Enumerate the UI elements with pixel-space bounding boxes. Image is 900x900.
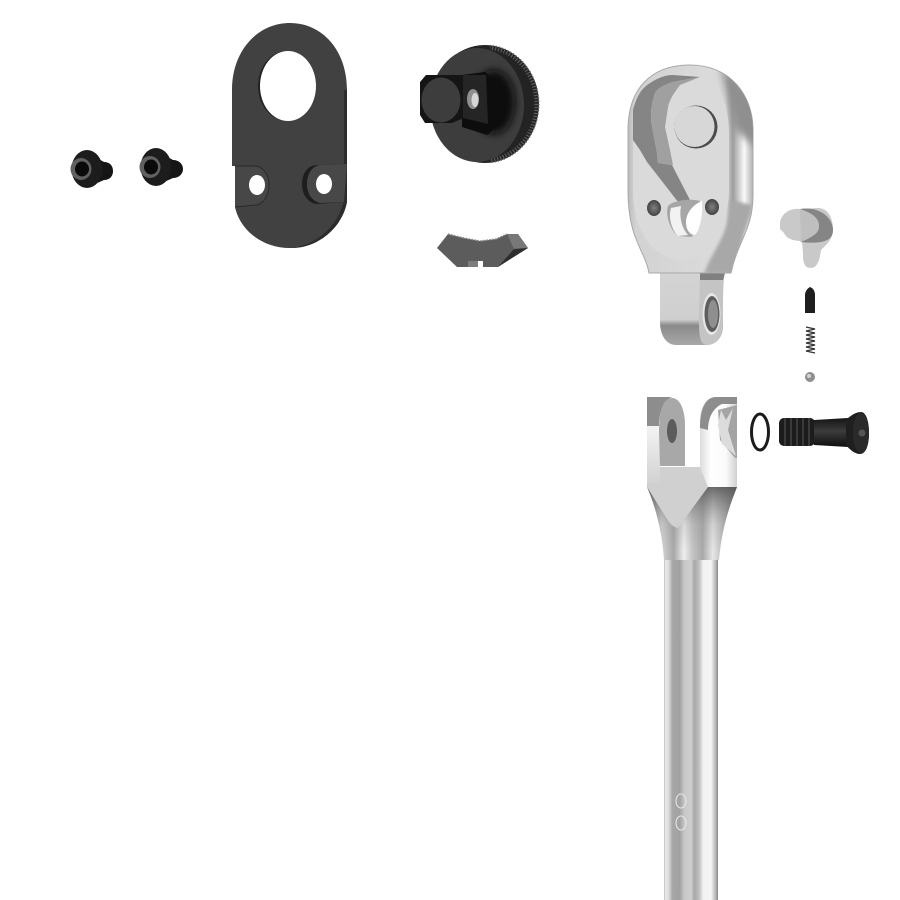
fork right block — [700, 397, 737, 487]
screw: small right — [140, 148, 183, 186]
plate holes — [249, 51, 332, 195]
recess channel outer — [633, 75, 700, 207]
cover plate — [232, 23, 347, 248]
handle with fork — [647, 397, 737, 900]
ratchet gear with square drive — [420, 45, 539, 163]
head circle recess — [674, 106, 718, 148]
fork left top — [647, 397, 672, 426]
recess channel inner — [651, 77, 700, 165]
ratchet head — [628, 65, 760, 345]
fork pivot hole — [667, 419, 677, 443]
fork left prong face — [659, 398, 685, 466]
pivot screw — [779, 412, 869, 454]
head screw holes — [647, 199, 719, 216]
handle markings — [676, 794, 686, 830]
detent pin — [805, 287, 815, 313]
pawl — [437, 234, 528, 267]
fork left strip — [647, 425, 660, 483]
selector lever — [780, 208, 833, 268]
handle neck — [647, 487, 737, 560]
head lower tab — [660, 270, 725, 345]
fork lower face — [647, 432, 708, 528]
steel ball — [805, 372, 815, 382]
handle shaft — [664, 555, 718, 900]
head side shading — [704, 71, 753, 272]
o-ring — [752, 414, 768, 450]
screw: small left — [70, 150, 113, 188]
head body — [628, 65, 753, 273]
spring — [806, 327, 815, 353]
head face — [633, 76, 729, 260]
central opening — [667, 200, 702, 237]
